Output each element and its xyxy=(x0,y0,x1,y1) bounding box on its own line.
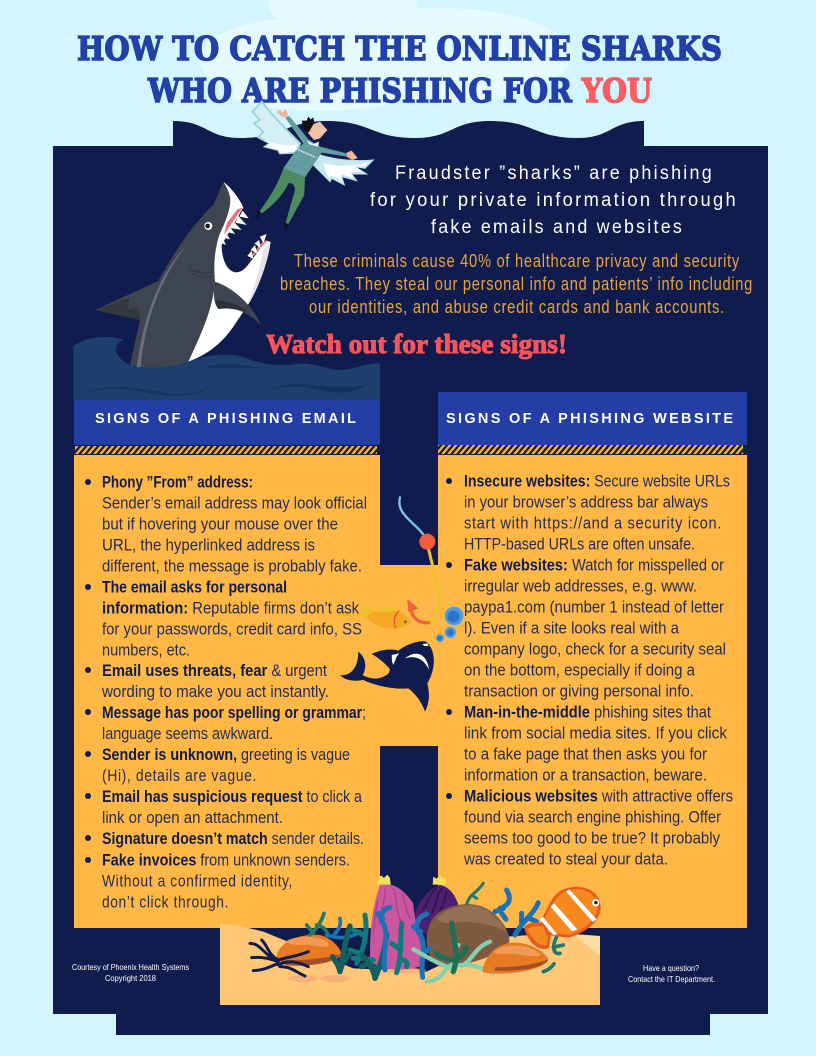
illustration: sand and reef xyxy=(220,875,601,1005)
text: email signs: The email asks for personal xyxy=(102,578,287,596)
pink coral xyxy=(370,884,422,970)
text: email signs: wording to make you act instantly. xyxy=(101,683,329,701)
intro statement xyxy=(370,163,738,238)
text: email signs: don’t click through. xyxy=(102,894,229,912)
contact xyxy=(628,963,715,984)
credit xyxy=(72,962,189,983)
text: email signs: Signature doesn’t match sender details. xyxy=(102,830,364,848)
text: email signs: for your passwords, credit card info, SS xyxy=(102,620,362,638)
rock xyxy=(427,904,509,967)
panel: email signs header: SIGNS OF A PHISHING EMAIL xyxy=(95,411,356,427)
intro statement: for your private information through xyxy=(370,190,738,211)
text: email signs: Phony ”From” address: xyxy=(102,474,253,492)
title: HOW TO CATCH THE ONLINE SHARKS xyxy=(77,29,722,68)
text: website signs: link from social media sites. If you click xyxy=(464,724,728,742)
title xyxy=(77,29,722,110)
text: email signs: but if hovering your mouse over the xyxy=(102,516,338,534)
text: email signs: Email uses threats, fear & urgent xyxy=(102,662,327,680)
text: website signs: seems too good to be true? It probably xyxy=(464,830,721,848)
text: website signs: l). Even if a site looks real with a xyxy=(464,620,680,638)
cloud xyxy=(200,0,572,111)
text: website signs: Fake websites: Watch for misspelled or xyxy=(464,556,724,574)
text: email signs: Message has poor spelling or grammar; xyxy=(102,704,366,722)
text: website signs: on the bottom, especially if doing a xyxy=(464,662,696,680)
illustration: leaping shark xyxy=(95,182,271,368)
panel: orange H body xyxy=(74,455,747,928)
seaweeds back xyxy=(307,913,563,972)
text: email signs: URL, the hyperlinked address is xyxy=(102,536,315,554)
weed front xyxy=(413,942,493,982)
text: website signs: was created to steal your data. xyxy=(463,850,668,868)
left shell xyxy=(277,935,342,966)
text: email signs: link or open an attachment. xyxy=(102,809,283,827)
seaweed left tentacles xyxy=(250,940,308,976)
text: email signs: Fake invoices from unknown senders. xyxy=(102,852,350,870)
purple coral xyxy=(414,885,459,943)
text: email signs: Sender’s email address may look official xyxy=(102,494,367,512)
text: website signs xyxy=(446,472,733,868)
illustration: fish hook, fish, small shark xyxy=(340,497,463,712)
text: website signs: Malicious websites with attractive offers xyxy=(464,788,733,806)
text: website signs: start with https://and a security icon. xyxy=(464,514,722,532)
text: email signs: numbers, etc. xyxy=(102,642,190,660)
text: website signs: Man-in-the-middle phishing sites that xyxy=(464,704,711,722)
text: email signs: Sender is unknown, greeting is vague xyxy=(102,746,350,764)
text: email signs xyxy=(85,474,367,912)
text: website signs: Insecure websites: Secure website URLs xyxy=(464,472,730,490)
text: website signs: transaction or giving personal info. xyxy=(464,682,694,700)
contact: Have a question? xyxy=(643,963,699,973)
credit: Copyright 2018 xyxy=(105,973,156,983)
intro details xyxy=(280,251,753,317)
text: website signs: found via search engine phishing. Offer xyxy=(464,808,721,826)
panel: email signs header xyxy=(74,400,380,454)
text: email signs: information: Reputable firms don’t ask xyxy=(102,600,360,618)
text: website signs: company logo, check for a security seal xyxy=(464,640,726,658)
text: website signs: irregular web addresses, e.g. www. xyxy=(464,578,697,596)
heading: watch out: Watch out for these signs! xyxy=(266,329,567,359)
credit: Courtesy of Phoenix Health Systems xyxy=(72,962,189,972)
panel: website signs header: SIGNS OF A PHISHING WEBSITE xyxy=(446,411,733,427)
intro statement: Fraudster ”sharks” are phishing xyxy=(395,163,714,184)
navy backdrop xyxy=(53,121,768,1035)
text: email signs: Email has suspicious request to click a xyxy=(102,788,363,806)
contact: Contact the IT Department. xyxy=(628,974,715,984)
illustration: winged man xyxy=(252,102,373,230)
text: website signs: paypa1.com (number 1 instead of letter xyxy=(464,598,724,616)
text: website signs: to a fake page that then asks you for xyxy=(464,746,707,764)
text: email signs: language seems awkward. xyxy=(102,725,273,743)
text: website signs: information or a transaction, beware. xyxy=(464,766,707,784)
intro statement: fake emails and websites xyxy=(431,217,684,238)
illustration: sea wave xyxy=(73,337,380,400)
text: email signs: different, the message is probably fake. xyxy=(102,558,362,576)
right shell xyxy=(483,943,548,974)
text: website signs: HTTP-based URLs are often unsafe. xyxy=(464,536,695,554)
text: email signs: Without a confirmed identity, xyxy=(102,872,293,890)
title: WHO ARE PHISHING FOR YOU xyxy=(147,71,652,110)
text: website signs: in your browser’s address bar always xyxy=(464,494,708,512)
clownfish xyxy=(524,887,601,949)
panel: website signs header xyxy=(438,392,747,454)
text: email signs: (Hi), details are vague. xyxy=(102,767,257,785)
intro details: our identities, and abuse credit cards and bank accounts. xyxy=(309,297,725,317)
